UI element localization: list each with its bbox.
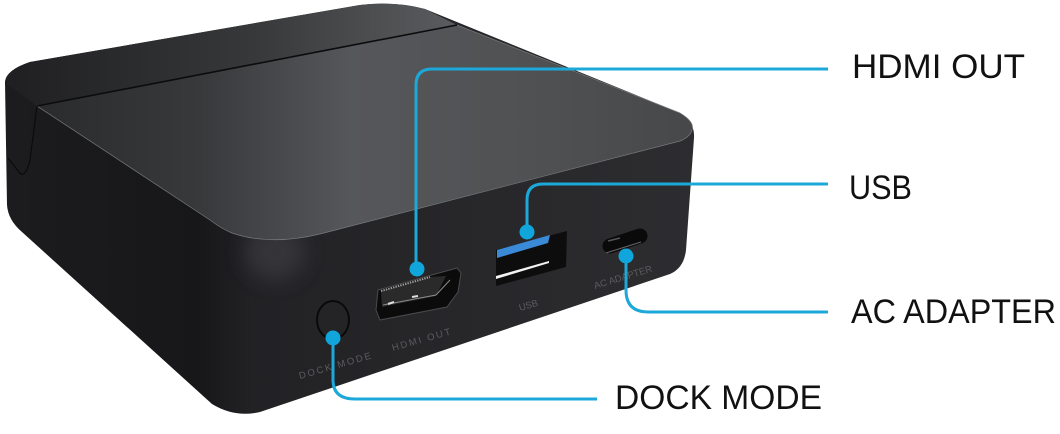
callout: AC ADAPTER [618, 248, 1056, 331]
top face [37, 25, 692, 240]
callout: HDMI OUT: HDMI OUT [852, 48, 1025, 86]
USB port [496, 231, 567, 286]
callout: DOCK MODE: DOCK MODE [615, 379, 822, 417]
label: hdmi out on device: HDMI OUT [391, 326, 452, 354]
panel groove [8, 106, 37, 174]
callout: USB: USB [849, 169, 912, 207]
callout: HDMI OUT [410, 48, 1025, 276]
printed port labels [298, 264, 654, 382]
callout: AC ADAPTER: AC ADAPTER [851, 293, 1056, 331]
dock mode button [317, 301, 349, 339]
HDMI port [376, 268, 461, 320]
label: ac adapter on device: AC ADAPTER [593, 264, 654, 292]
front corner highlight [245, 238, 304, 280]
callout: USB [520, 169, 912, 240]
device body silhouette [5, 4, 694, 414]
rear lid [5, 4, 457, 106]
label: usb on device: USB [518, 298, 540, 314]
label: dock mode on device: DOCK MODE [298, 351, 373, 382]
dock device [5, 4, 694, 414]
lid seam [37, 25, 457, 106]
USB-C port [606, 236, 641, 253]
callout: DOCK MODE [326, 330, 822, 417]
